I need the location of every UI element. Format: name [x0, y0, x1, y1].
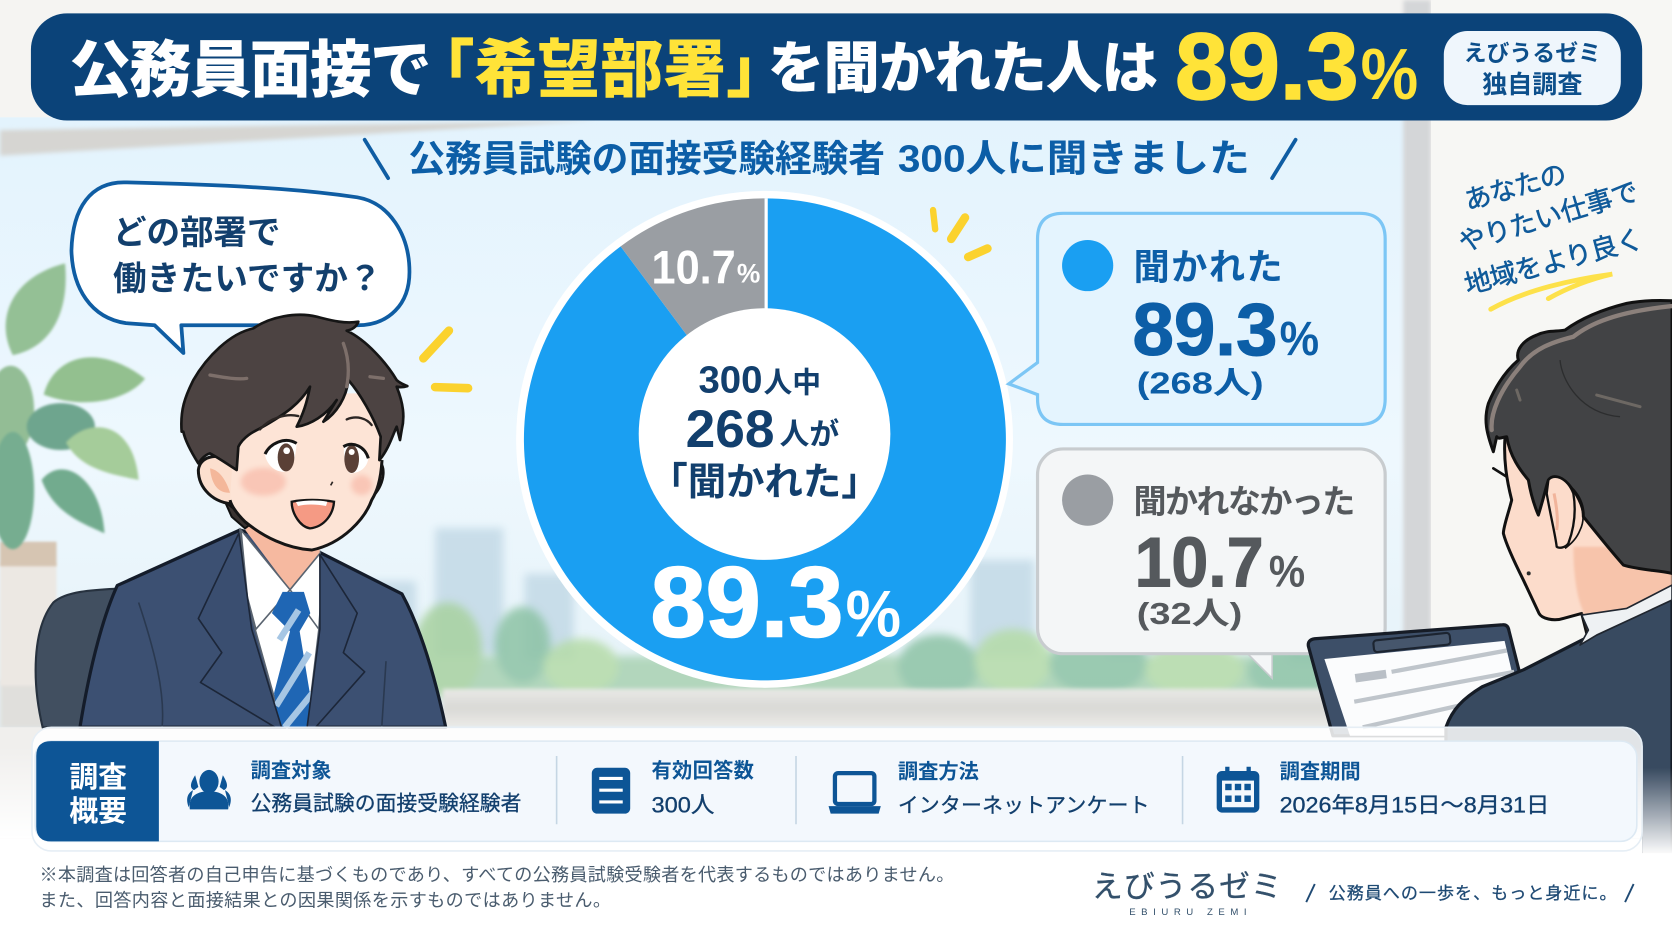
face	[230, 393, 383, 550]
center text: 300	[698, 358, 762, 401]
suit	[1446, 597, 1672, 853]
label 10.7%: 10.7	[652, 242, 736, 294]
item: 調査期間: 2026年8月15日〜8月31日	[1280, 793, 1549, 818]
footnote: ※本調査は回答者の自己申告に基づくものであり、すべての公務員試験受験者を代表するものではありません。	[39, 865, 954, 885]
eyebrow	[1493, 468, 1507, 477]
legend card: 聞かれた: 89.3	[1132, 287, 1277, 371]
legend card: 聞かれた: 聞かれた	[1134, 246, 1283, 287]
head	[1486, 300, 1672, 645]
subheading: 公務員試験の面接受験経験者	[408, 139, 885, 180]
bottom fade	[0, 746, 1672, 941]
item: 調査対象	[187, 758, 521, 815]
title banner	[31, 13, 1642, 121]
item: 調査期間: 調査期間	[1280, 760, 1361, 783]
footnote: また、回答内容と面接結果との因果関係を示すものではありません。	[39, 890, 611, 910]
item: 有効回答数: 300人	[652, 793, 714, 818]
lapels	[198, 533, 282, 727]
brows	[260, 415, 372, 429]
face and neck	[1503, 437, 1672, 633]
hair	[181, 315, 407, 470]
title banner: を聞かれた人は	[768, 36, 1158, 99]
legend card: 聞かれた: %	[1280, 313, 1319, 366]
title banner: 89.3	[1175, 14, 1359, 120]
title banner: %	[1361, 34, 1418, 115]
badge: えびうるゼミ独自調査: 独自調査	[1482, 71, 1582, 99]
speech bubble: question: どの部署で	[113, 214, 280, 252]
logo: EBIURU ZEMI	[1129, 907, 1247, 918]
segment: 聞かれなかった 10.7%	[621, 198, 765, 439]
mouth	[292, 500, 334, 528]
legend card: 聞かれなかった: (32人)	[1137, 596, 1242, 631]
logo: えびうるゼミ	[1092, 869, 1282, 904]
label 89.3%: 89.3	[650, 547, 843, 659]
item: 調査方法: 調査方法	[898, 760, 979, 783]
head	[181, 315, 407, 550]
ear	[198, 456, 237, 504]
handwritten message: やりたい仕事で	[1455, 176, 1642, 258]
item: 調査方法	[829, 760, 1150, 818]
survey summary panel	[32, 727, 1642, 851]
legend card: 聞かれなかった	[1038, 449, 1385, 678]
item: 有効回答数	[592, 758, 754, 818]
item: 調査対象: 調査対象	[251, 758, 332, 782]
hair	[1486, 300, 1672, 573]
jacket	[80, 530, 446, 727]
legend card: 聞かれた: (268人)	[1137, 366, 1264, 401]
item: 有効回答数: 有効回答数	[652, 758, 754, 782]
collar	[1580, 585, 1672, 645]
panel header: 概要	[69, 796, 127, 828]
center text: 268	[686, 400, 775, 459]
panel header	[36, 741, 159, 841]
chair	[36, 589, 117, 727]
label 89.3%: %	[846, 578, 901, 652]
badge: えびうるゼミ独自調査: えびうるゼミ	[1464, 40, 1601, 66]
speech bubble: question: 働きたいですか？	[113, 260, 382, 298]
eyes	[265, 441, 297, 472]
center text	[649, 358, 880, 504]
badge: えびうるゼミ独自調査	[1444, 31, 1621, 105]
title banner: 「希望部署」	[412, 36, 789, 106]
label 10.7%: %	[737, 259, 760, 289]
sparks near donut	[933, 210, 987, 257]
speech bubble: question	[71, 182, 409, 353]
segment: 聞かれた 89.3%	[524, 198, 1006, 680]
legend card: 聞かれなかった: %	[1269, 547, 1305, 597]
panel header: 調査	[69, 762, 127, 794]
icon: calendar	[1217, 767, 1259, 813]
handwritten message: 地域をより良く	[1461, 224, 1646, 300]
handwritten message: あなたの	[1461, 158, 1570, 216]
sparks near speaker	[423, 331, 468, 388]
legend card: 聞かれなかった: 10.7	[1135, 523, 1264, 602]
ear	[1547, 477, 1575, 548]
legend card: 聞かれた	[1009, 213, 1385, 424]
right ear	[374, 460, 383, 495]
icon: people	[187, 770, 231, 809]
item: 調査対象: 公務員試験の面接受験経験者	[251, 792, 521, 815]
tagline: 公務員への一歩を、もっと身近に。	[1329, 884, 1617, 903]
subheading: 300人に聞きました	[898, 139, 1250, 181]
center hole	[639, 308, 890, 560]
character: interviewer	[1446, 300, 1672, 853]
icon: laptop	[829, 773, 881, 814]
item: 調査期間	[1217, 760, 1549, 818]
item: 調査方法: インターネットアンケート	[898, 795, 1150, 818]
title banner: 公務員面接で	[69, 37, 432, 106]
nose	[331, 482, 333, 485]
legend card: 聞かれなかった: 聞かれなかった	[1134, 484, 1355, 521]
plant	[0, 263, 145, 549]
neck hair	[225, 502, 252, 528]
center text: 人中	[763, 367, 821, 399]
footnote	[39, 865, 954, 910]
tie	[272, 592, 312, 727]
center text: 人が	[779, 418, 839, 452]
icon: document	[592, 768, 630, 814]
yellow underline	[1491, 274, 1612, 309]
donut chart	[516, 191, 1013, 688]
clipboard	[1308, 625, 1536, 736]
character: applicant	[80, 315, 446, 727]
handwritten message	[1455, 158, 1646, 309]
center text: 「聞かれた」	[649, 461, 880, 504]
subheading	[365, 139, 1296, 181]
